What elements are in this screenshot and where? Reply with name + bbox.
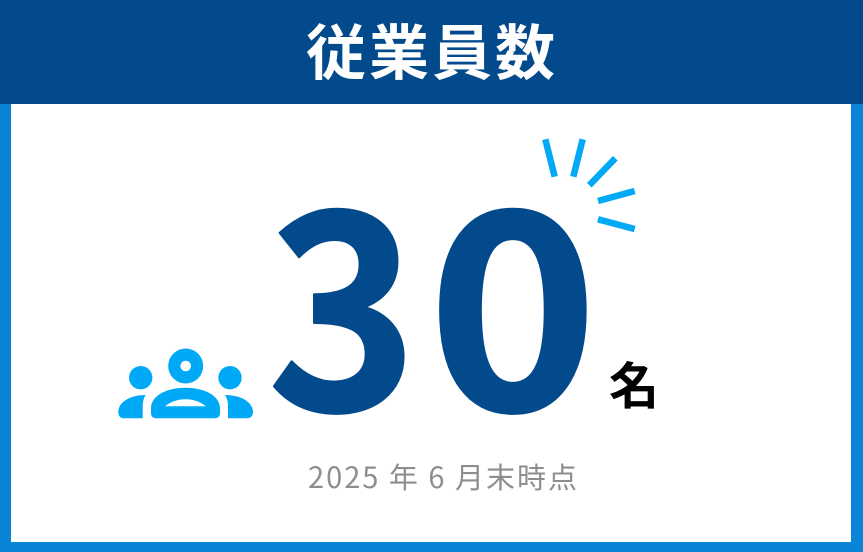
header band xyxy=(0,0,863,104)
big number: 3 xyxy=(268,102,418,488)
date note: 2025 年 6 月末時点 xyxy=(308,455,579,497)
big number: 0 xyxy=(428,101,598,488)
big number xyxy=(268,101,598,488)
icon: people group xyxy=(118,348,253,418)
icon: sparkle rays xyxy=(545,139,635,229)
title: 従業員数 xyxy=(306,6,558,92)
unit label: 名 xyxy=(609,347,659,419)
